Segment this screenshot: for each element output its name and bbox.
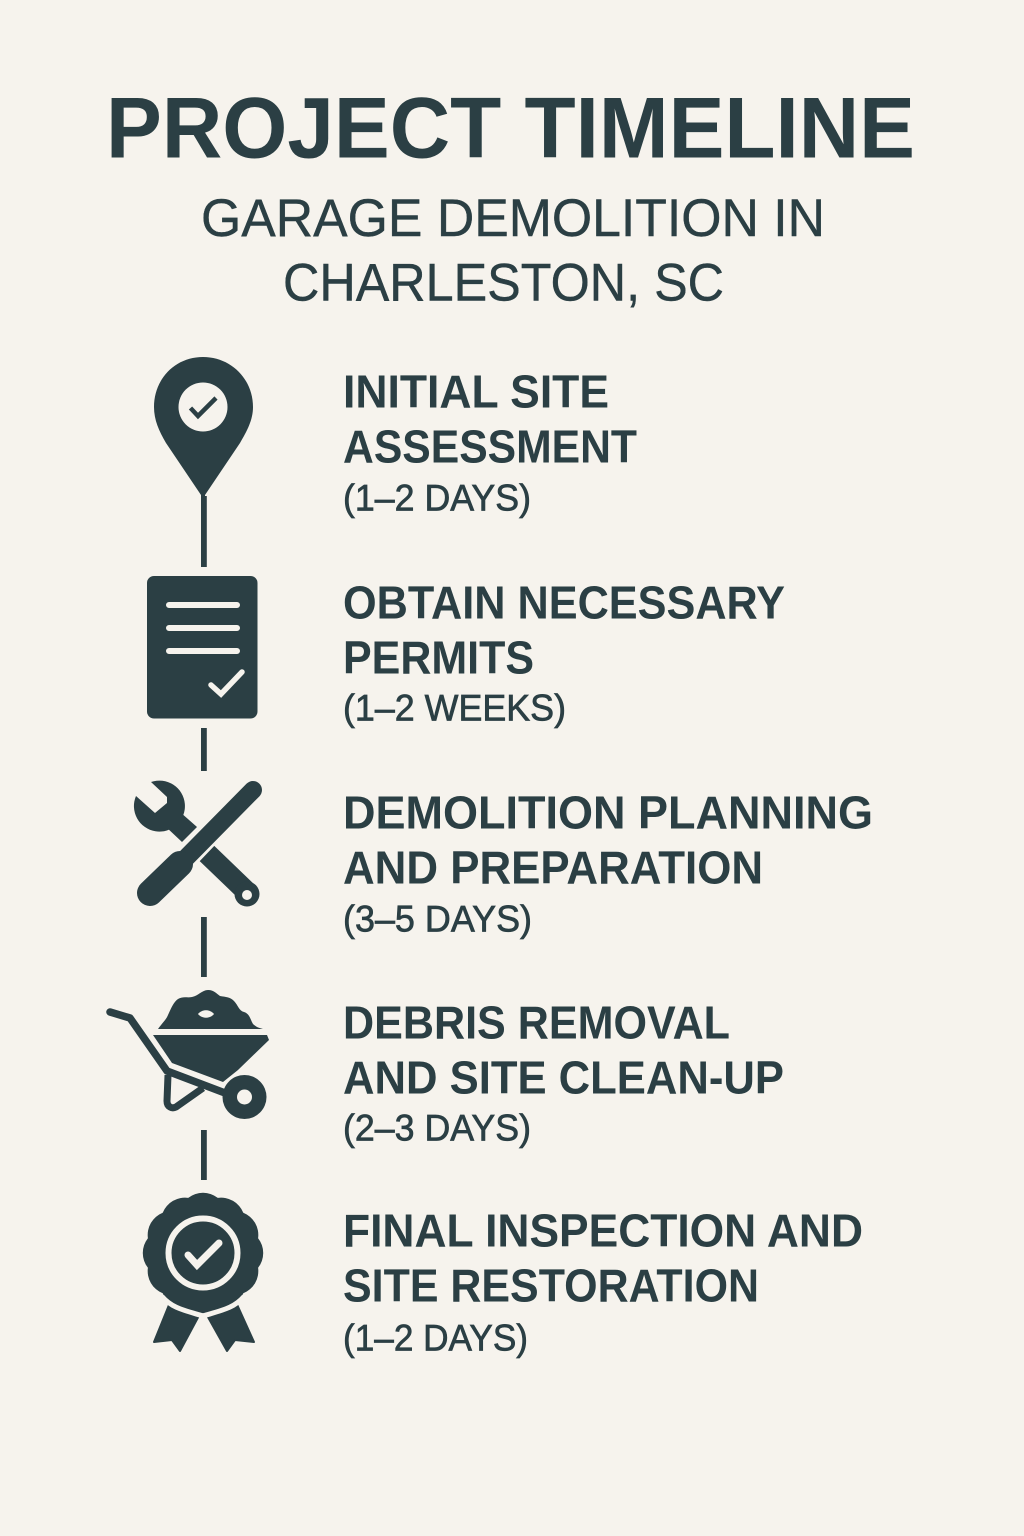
step 4 text bbox=[343, 997, 784, 1149]
connector 3 bbox=[201, 917, 207, 977]
subtitle: CHARLESTON, SC bbox=[283, 254, 724, 312]
connector 1 bbox=[201, 496, 207, 567]
step 1 text: INITIAL SITE bbox=[343, 366, 609, 418]
icon: award badge with ribbons bbox=[143, 1193, 263, 1351]
step 3 text: (3–5 DAYS) bbox=[343, 899, 532, 940]
step 2 text bbox=[343, 577, 785, 729]
connector 2 bbox=[201, 728, 207, 771]
step 5 text: SITE RESTORATION bbox=[343, 1260, 759, 1312]
step 4 text: (2–3 DAYS) bbox=[343, 1108, 531, 1149]
step 2 text: OBTAIN NECESSARY bbox=[343, 577, 785, 629]
step 3 text: AND PREPARATION bbox=[343, 842, 763, 894]
subtitle: GARAGE DEMOLITION IN bbox=[201, 189, 825, 248]
step 2 text: (1–2 WEEKS) bbox=[343, 688, 566, 729]
icon: wheelbarrow bbox=[110, 990, 269, 1119]
step 4 text: DEBRIS REMOVAL bbox=[343, 997, 730, 1049]
step 3 text: DEMOLITION PLANNING bbox=[343, 787, 873, 839]
step 4 text: AND SITE CLEAN-UP bbox=[343, 1052, 784, 1104]
step 1 text bbox=[343, 366, 637, 519]
icon: crossed wrench and screwdriver bbox=[134, 781, 260, 906]
step 1 text: ASSESSMENT bbox=[343, 421, 637, 473]
subtitle bbox=[201, 189, 825, 312]
step 2 text: PERMITS bbox=[343, 632, 534, 684]
title: PROJECT TIMELINE bbox=[106, 80, 915, 176]
connector 4 bbox=[201, 1130, 207, 1180]
step 5 text: (1–2 DAYS) bbox=[343, 1318, 528, 1359]
icon: location pin with check bbox=[154, 357, 253, 497]
step 1 text: (1–2 DAYS) bbox=[343, 478, 531, 519]
icon: permit document with check bbox=[147, 576, 258, 718]
step 5 text: FINAL INSPECTION AND bbox=[343, 1205, 863, 1257]
step 3 text bbox=[343, 787, 873, 940]
step 5 text bbox=[343, 1205, 863, 1359]
